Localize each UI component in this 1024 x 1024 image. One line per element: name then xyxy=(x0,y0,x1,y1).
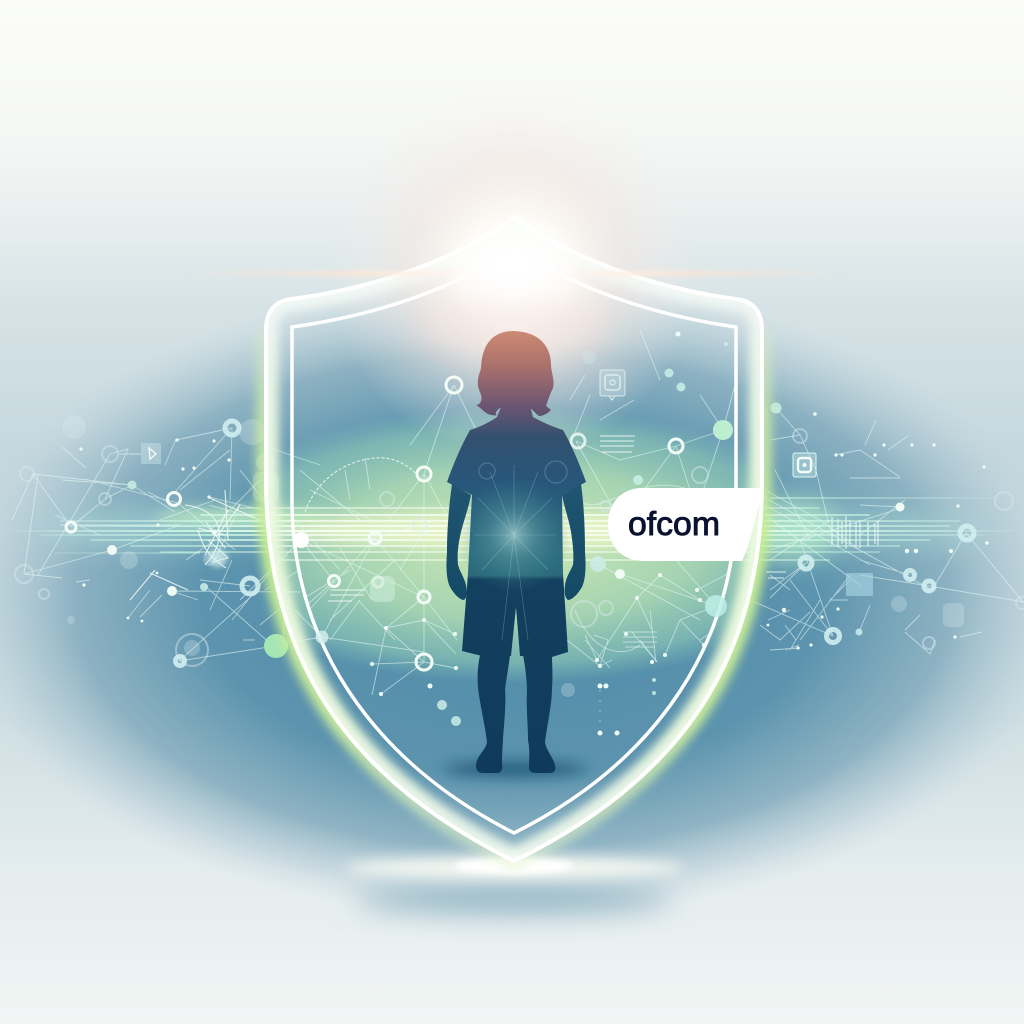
nodes: left side xyxy=(15,415,288,666)
pale nodes over the shield xyxy=(316,595,727,644)
green haze behind shield xyxy=(40,406,990,684)
nodes: right side xyxy=(767,402,1024,650)
hair and head xyxy=(476,331,554,416)
network: inside shield xyxy=(290,330,735,736)
top light flare xyxy=(329,87,699,457)
icon: camera tile right xyxy=(793,453,816,477)
chest light burst xyxy=(456,461,572,640)
ofcom logo text: ofcom xyxy=(628,505,720,542)
left arm xyxy=(446,484,471,600)
right leg xyxy=(523,655,555,773)
data beam xyxy=(10,498,1020,560)
shield: outer outline xyxy=(266,217,762,861)
network: left side xyxy=(12,428,322,661)
shield: inner outline xyxy=(292,248,736,833)
icon: blue square right xyxy=(846,573,873,596)
icon: speech tile inside shield xyxy=(600,370,625,400)
horizontal lens flare xyxy=(190,271,840,276)
shield: outer glow xyxy=(266,217,762,861)
right arm xyxy=(562,484,586,600)
ofcom pill xyxy=(608,488,762,561)
icon: faint person tile left of shield xyxy=(253,453,279,502)
child silhouette xyxy=(446,331,586,773)
left leg xyxy=(476,655,510,773)
floor glow xyxy=(344,856,684,915)
icon: faint rounded square right xyxy=(943,603,964,627)
node on shield edge xyxy=(293,532,309,548)
apex light bloom xyxy=(462,234,566,302)
icon: play tile xyxy=(141,443,161,464)
shorts xyxy=(462,573,568,657)
t-shirt xyxy=(447,402,586,573)
ground shadow xyxy=(443,762,587,776)
network: right side xyxy=(750,408,1024,654)
